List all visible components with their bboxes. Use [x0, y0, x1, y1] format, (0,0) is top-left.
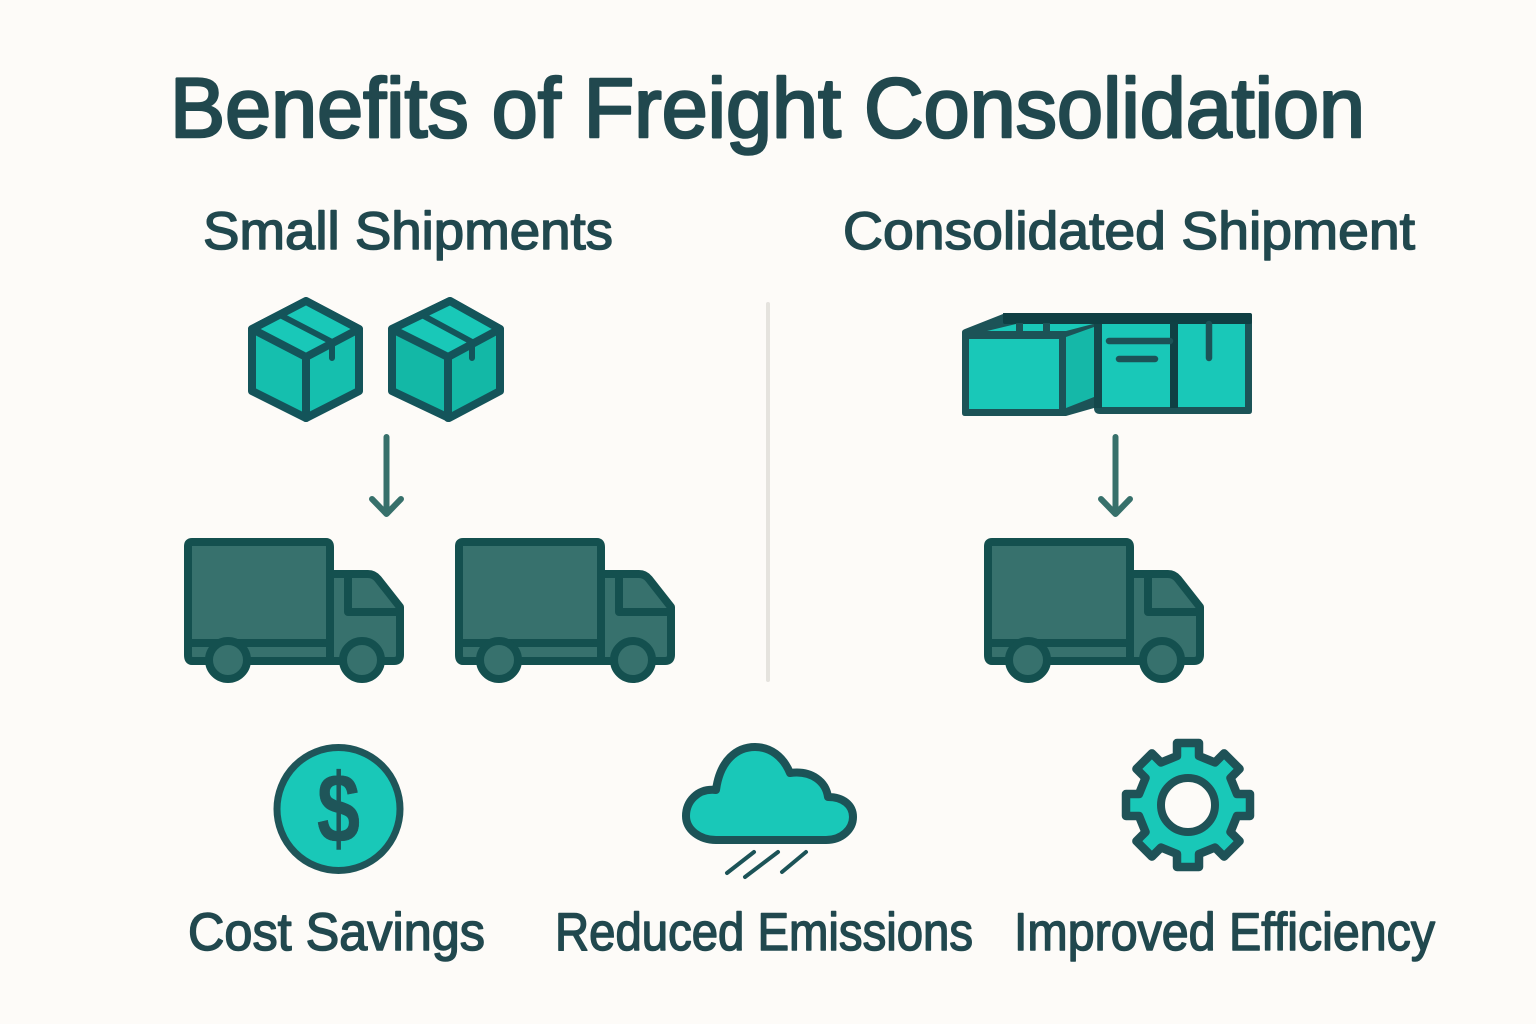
icon: small box one [252, 301, 359, 418]
label: reduced emissions: Reduced Emissions [555, 903, 973, 962]
label: cost savings: Cost Savings [188, 903, 485, 962]
icon: consolidated boxes [962, 313, 1252, 416]
icon: truck two [459, 542, 671, 679]
label: improved efficiency: Improved Efficiency [1014, 903, 1435, 962]
title: Benefits of Freight Consolidation [170, 61, 1365, 155]
icon: dollar coin [277, 748, 400, 870]
heading: consolidated shipment: Consolidated Shipment [843, 202, 1415, 261]
icon: gear [1126, 743, 1250, 867]
icon: dollar coin: $ [317, 753, 360, 863]
icon: small box two [392, 301, 500, 418]
icon: truck three [988, 542, 1200, 679]
icon: cloud with rain [686, 747, 853, 877]
heading: small shipments: Small Shipments [203, 202, 613, 261]
arrow: boxes to two trucks [372, 437, 401, 514]
arrow: consolidated boxes to truck [1101, 437, 1130, 514]
icon: truck one [188, 542, 400, 679]
